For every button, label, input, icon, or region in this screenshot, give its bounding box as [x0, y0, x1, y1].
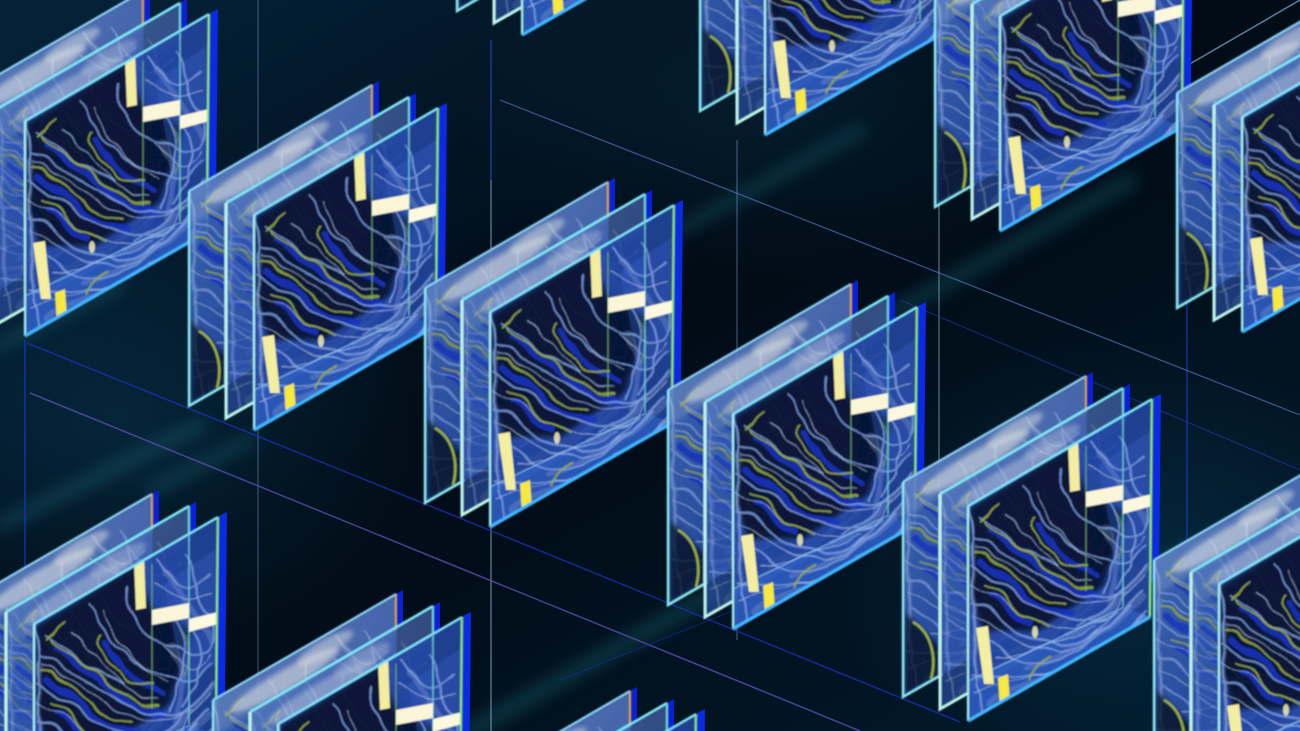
panel stack: bottom left	[0, 490, 227, 731]
panel stack: upper right	[935, 0, 1193, 231]
panel stack: left	[189, 81, 447, 430]
panel stack: top left	[0, 0, 218, 336]
panel stack: upper centre right	[700, 0, 958, 135]
panel stack: centre right	[668, 280, 926, 629]
panel stack: far right	[1177, 0, 1300, 332]
panel stack: lower right	[903, 372, 1161, 721]
panel stack: bottom right	[1154, 450, 1300, 731]
panel stack: top small	[457, 0, 715, 35]
panel stack: centre	[425, 178, 683, 527]
panel stack: bottom small	[447, 687, 705, 731]
panel stack: bottom left centre	[213, 590, 471, 731]
